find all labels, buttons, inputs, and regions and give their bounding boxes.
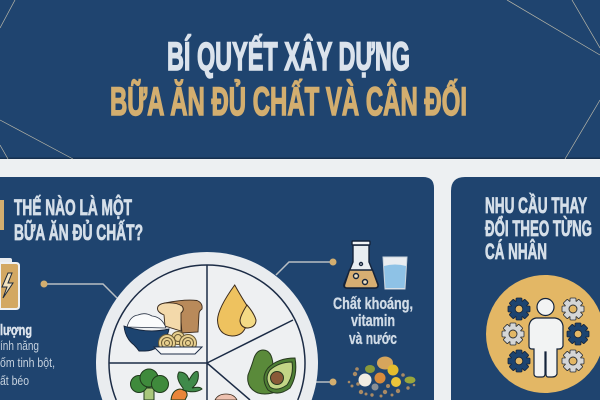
text: energy: ính năng [0,338,39,353]
icon: broccoli [130,369,168,400]
icon: carrot [171,371,202,400]
text: energy [0,322,55,388]
icon: person with gears [486,275,600,393]
icon: heading badge [0,200,4,230]
plate diagram [96,252,318,400]
heading: individual needs [485,193,592,264]
icon: nuts and seeds [348,356,416,398]
text: minerals, vitamins and water: Chất khoáng, [333,294,413,313]
arrow: minerals connector [276,258,336,275]
icon: noodles [154,332,202,354]
icon: oil drops [218,285,256,336]
panel: what is a balanced meal [0,177,434,400]
arrow: seeds connector [316,378,336,386]
title: BÍ QUYẾT XÂY DỰNG [167,33,410,79]
icon: water glass [383,257,407,289]
icon: avocado [248,350,296,394]
text: energy: ất béo [0,373,29,388]
text: minerals, vitamins and water [333,294,413,348]
text: minerals, vitamins and water: vitamin [351,311,395,330]
text: energy: lượng [0,322,32,339]
text: minerals, vitamins and water: và nước [349,329,397,348]
arrow: energy connector [40,280,117,298]
header band [0,0,600,159]
panel: individual needs [451,177,600,400]
icon: rice bowl [124,314,169,351]
title [110,33,467,124]
heading: what is a balanced meal: BỮA ĂN ĐỦ CHẤT? [14,220,143,245]
heading: individual needs: CÁ NHÂN [485,239,547,264]
icon: bread [157,300,202,333]
heading: what is a balanced meal [14,195,143,245]
icon: flask [344,241,378,288]
icon: protein [215,394,237,400]
icon: battery [0,258,19,309]
heading: what is a balanced meal: THẾ NÀO LÀ MỘT [14,195,132,220]
text: energy: ốm tinh bột, [0,355,55,370]
